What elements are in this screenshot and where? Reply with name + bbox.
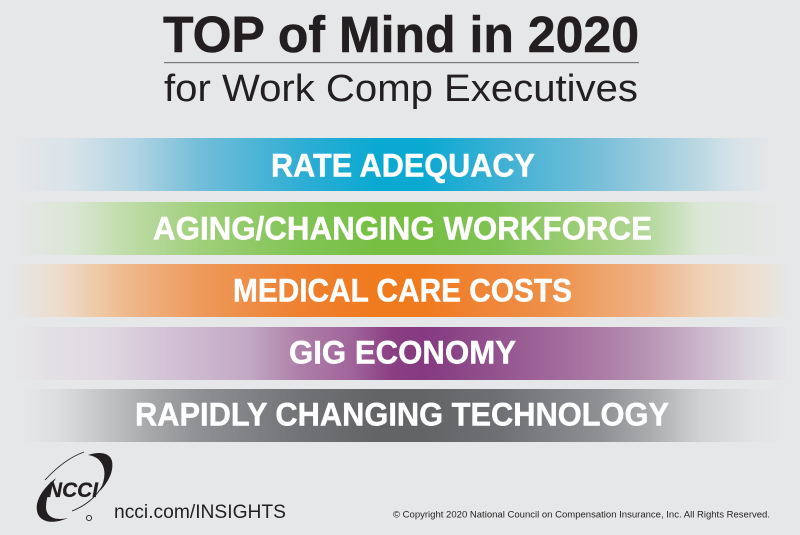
band: rapidly changing technology: [0, 389, 800, 442]
band: gig economy: [0, 327, 800, 380]
title: TOP of Mind in 2020: [163, 6, 639, 63]
copyright: © Copyright 2020 National Council on Compensation Insurance, Inc. All Rights Reserved.: [393, 510, 770, 520]
icon: NCCI logo: NCCI: [47, 479, 99, 502]
band: medical care costs: MEDICAL CARE COSTS: [233, 272, 572, 308]
band: aging/changing workforce: [0, 202, 800, 255]
band: aging/changing workforce: AGING/CHANGING WORKFORCE: [153, 210, 652, 246]
band: medical care costs: [0, 264, 800, 317]
subtitle: for Work Comp Executives: [164, 68, 638, 110]
band: gig economy: GIG ECONOMY: [289, 334, 516, 370]
band: rate adequacy: [0, 138, 800, 191]
band: rate adequacy: RATE ADEQUACY: [271, 148, 535, 184]
band: rapidly changing technology: RAPIDLY CHANGING TECHNOLOGY: [135, 396, 669, 432]
icon: NCCI logo: [37, 452, 112, 522]
link: ncci.com/INSIGHTS: ncci.com/INSIGHTS: [114, 501, 286, 523]
